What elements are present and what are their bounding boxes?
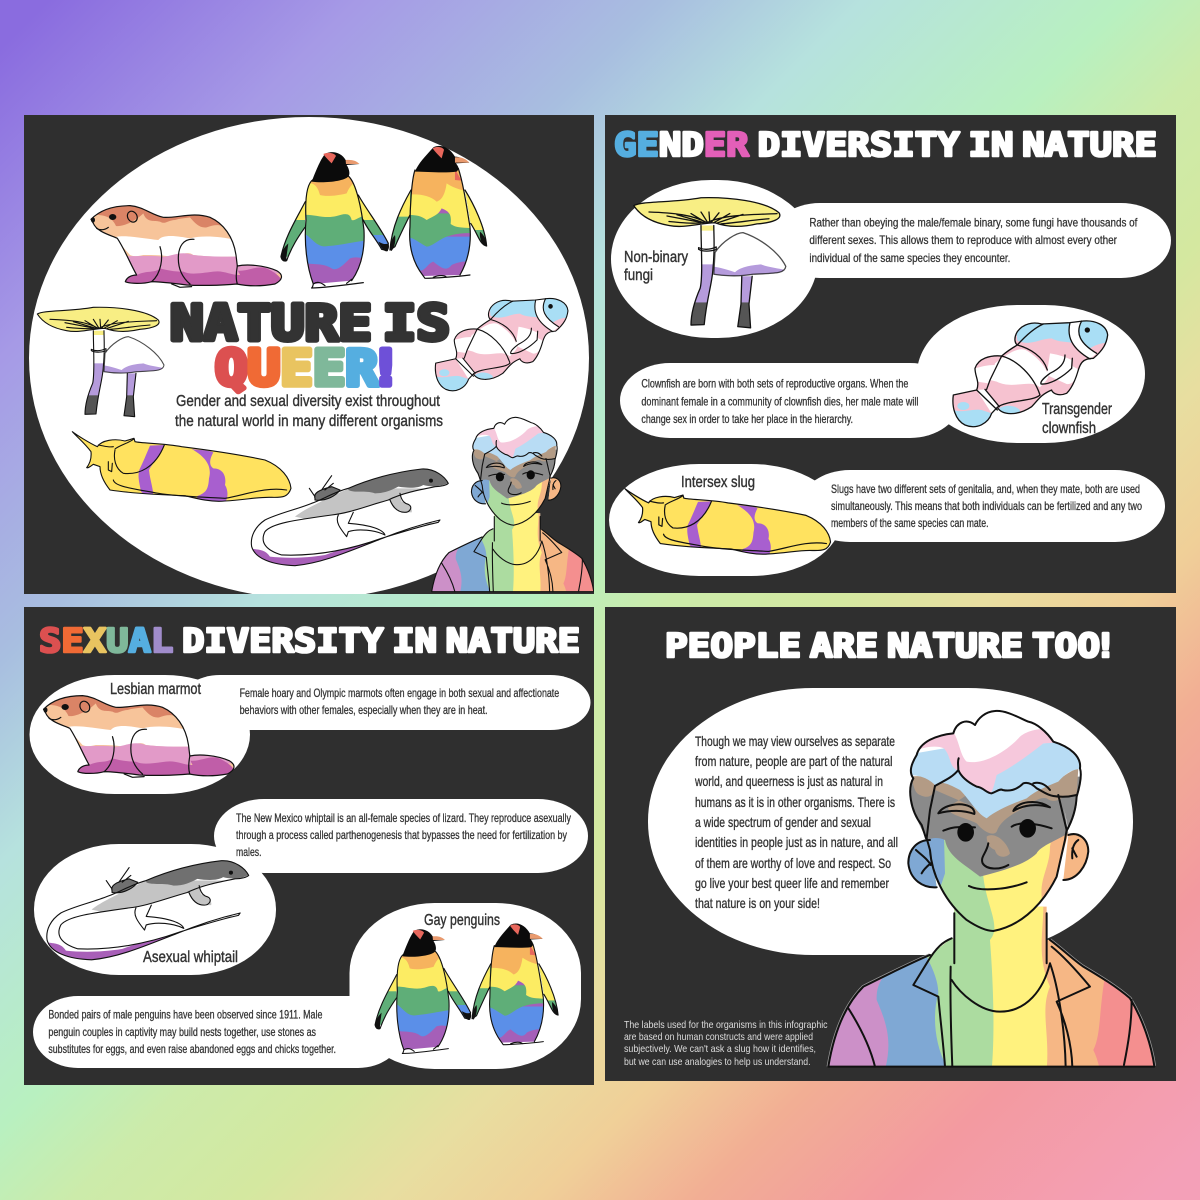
text: slug: members of the same species can mate. xyxy=(831,516,988,530)
footnote: The labels used for the organisms in this infographic xyxy=(624,1019,828,1031)
footnote: subjectively. We can't ask a slug how it identifies, xyxy=(624,1043,816,1055)
footnote: but we can use analogies to help us understand. xyxy=(624,1056,810,1068)
icon: penguins xyxy=(371,924,561,1054)
text: whiptail: males. xyxy=(236,845,262,859)
blob: marmot xyxy=(30,675,590,794)
subtitle: the natural world in many different organisms xyxy=(175,413,443,430)
text: marmot xyxy=(240,686,559,717)
label: non-binary fungi xyxy=(624,249,688,284)
panel: gender diversity xyxy=(605,115,1176,593)
blob: penguins xyxy=(33,903,581,1069)
panel: sexual diversity xyxy=(24,607,594,1085)
footnote: are based on human constructs and were applied xyxy=(624,1031,813,1043)
text: people paragraph: go live your best queer life and remember xyxy=(695,875,889,891)
text: people paragraph: Though we may view ourselves as separate xyxy=(695,733,895,749)
icon: fungi xyxy=(634,198,789,330)
text: penguins xyxy=(48,1008,336,1056)
icon: slug xyxy=(70,428,297,505)
icon: person xyxy=(428,412,597,595)
text: marmot: Female hoary and Olympic marmots often engage in both sexual and affectionate xyxy=(240,686,559,700)
text: whiptail: The New Mexico whiptail is an all-female species of lizard. They reproduce asexually xyxy=(236,811,571,825)
text: people paragraph: a wide spectrum of gender and sexual xyxy=(695,814,871,830)
text: clownfish: Clownfish are born with both sets of reproductive organs. When the xyxy=(641,377,909,391)
heading: gender diversity in nature: GENDER DIVERSITY IN NATURE xyxy=(614,125,1157,164)
icon: whiptail lizard xyxy=(248,465,452,572)
text: whiptail xyxy=(236,811,571,859)
text: people paragraph: identities in people just as in nature, and all xyxy=(695,834,898,850)
subtitle xyxy=(175,393,443,430)
text: fungi: Rather than obeying the male/female binary, some fungi have thousands of xyxy=(809,216,1138,230)
text: fungi xyxy=(809,216,1138,265)
label: transgender clownfish: Transgender xyxy=(1042,401,1113,418)
icon: whiptail lizard xyxy=(44,857,252,966)
icon: clownfish xyxy=(433,295,570,397)
icon: marmot xyxy=(39,693,239,778)
text: people paragraph: that nature is on your side! xyxy=(695,895,820,911)
icon: person xyxy=(820,700,1160,1073)
icon: marmot xyxy=(87,203,287,288)
text: penguins: penguin couples in captivity may build nests together, use stones as xyxy=(48,1025,316,1039)
subtitle: Gender and sexual diversity exist throughout xyxy=(176,393,440,410)
label: transgender clownfish xyxy=(1042,401,1113,437)
title: nature is: NATURE IS xyxy=(170,295,450,352)
panel: people are nature too xyxy=(605,607,1176,1081)
text: people paragraph: from nature, people are part of the natural xyxy=(695,753,892,769)
label: intersex slug: Intersex slug xyxy=(681,474,755,491)
blob: fungi xyxy=(611,180,1171,338)
icon: slug xyxy=(623,486,836,558)
label: transgender clownfish: clownfish xyxy=(1042,420,1096,437)
icon: penguins xyxy=(277,146,490,288)
text: penguins: substitutes for eggs, and even raise abandoned eggs and chicks together. xyxy=(48,1042,336,1056)
heading: people are nature too: PEOPLE ARE NATURE TOO ! xyxy=(665,626,1117,665)
label: non-binary fungi: fungi xyxy=(624,267,653,284)
text: fungi: individual of the same species they encounter. xyxy=(809,251,1010,265)
text: fungi: different sexes. This allows them to reproduce with almost every other xyxy=(809,233,1117,247)
text: slug xyxy=(831,482,1142,530)
speech blob xyxy=(648,688,1133,955)
icon: fungi xyxy=(37,307,167,419)
label: asexual whiptail: Asexual whiptail xyxy=(143,949,238,966)
footnote xyxy=(624,1019,828,1068)
icon: clownfish xyxy=(950,317,1110,433)
label: non-binary fungi: Non-binary xyxy=(624,249,688,266)
text: clownfish xyxy=(641,377,918,426)
title: queer: QUEER! xyxy=(215,340,402,397)
blob: clownfish xyxy=(620,305,1145,443)
text: clownfish: dominant female in a community of clownfish dies, her male mate will xyxy=(641,395,918,409)
label: gay penguins: Gay penguins xyxy=(424,912,500,929)
text: people paragraph: humans as it is in other organisms. There is xyxy=(695,794,895,810)
label: lesbian marmot: Lesbian marmot xyxy=(110,681,201,698)
text: whiptail: through a process called parthenogenesis that bypasses the need for fertilization by xyxy=(236,828,567,842)
text: marmot: behaviors with other females, especially when they are in heat. xyxy=(240,703,488,717)
panel: Nature is queer xyxy=(24,115,597,599)
text: people paragraph: of them are worthy of love and respect. So xyxy=(695,855,891,871)
text: people paragraph: world, and queerness is just as natural in xyxy=(694,773,883,789)
blob: whiptail xyxy=(34,799,588,975)
text: penguins: Bonded pairs of male penguins have been observed since 1911. Male xyxy=(48,1008,323,1022)
text: clownfish: change sex in order to take her place in the hierarchy. xyxy=(641,412,853,426)
text: people paragraph xyxy=(694,733,898,911)
blob: slug xyxy=(609,464,1165,576)
heading: sexual diversity in nature: SEXUAL DIVERSITY IN NATURE xyxy=(39,621,580,660)
